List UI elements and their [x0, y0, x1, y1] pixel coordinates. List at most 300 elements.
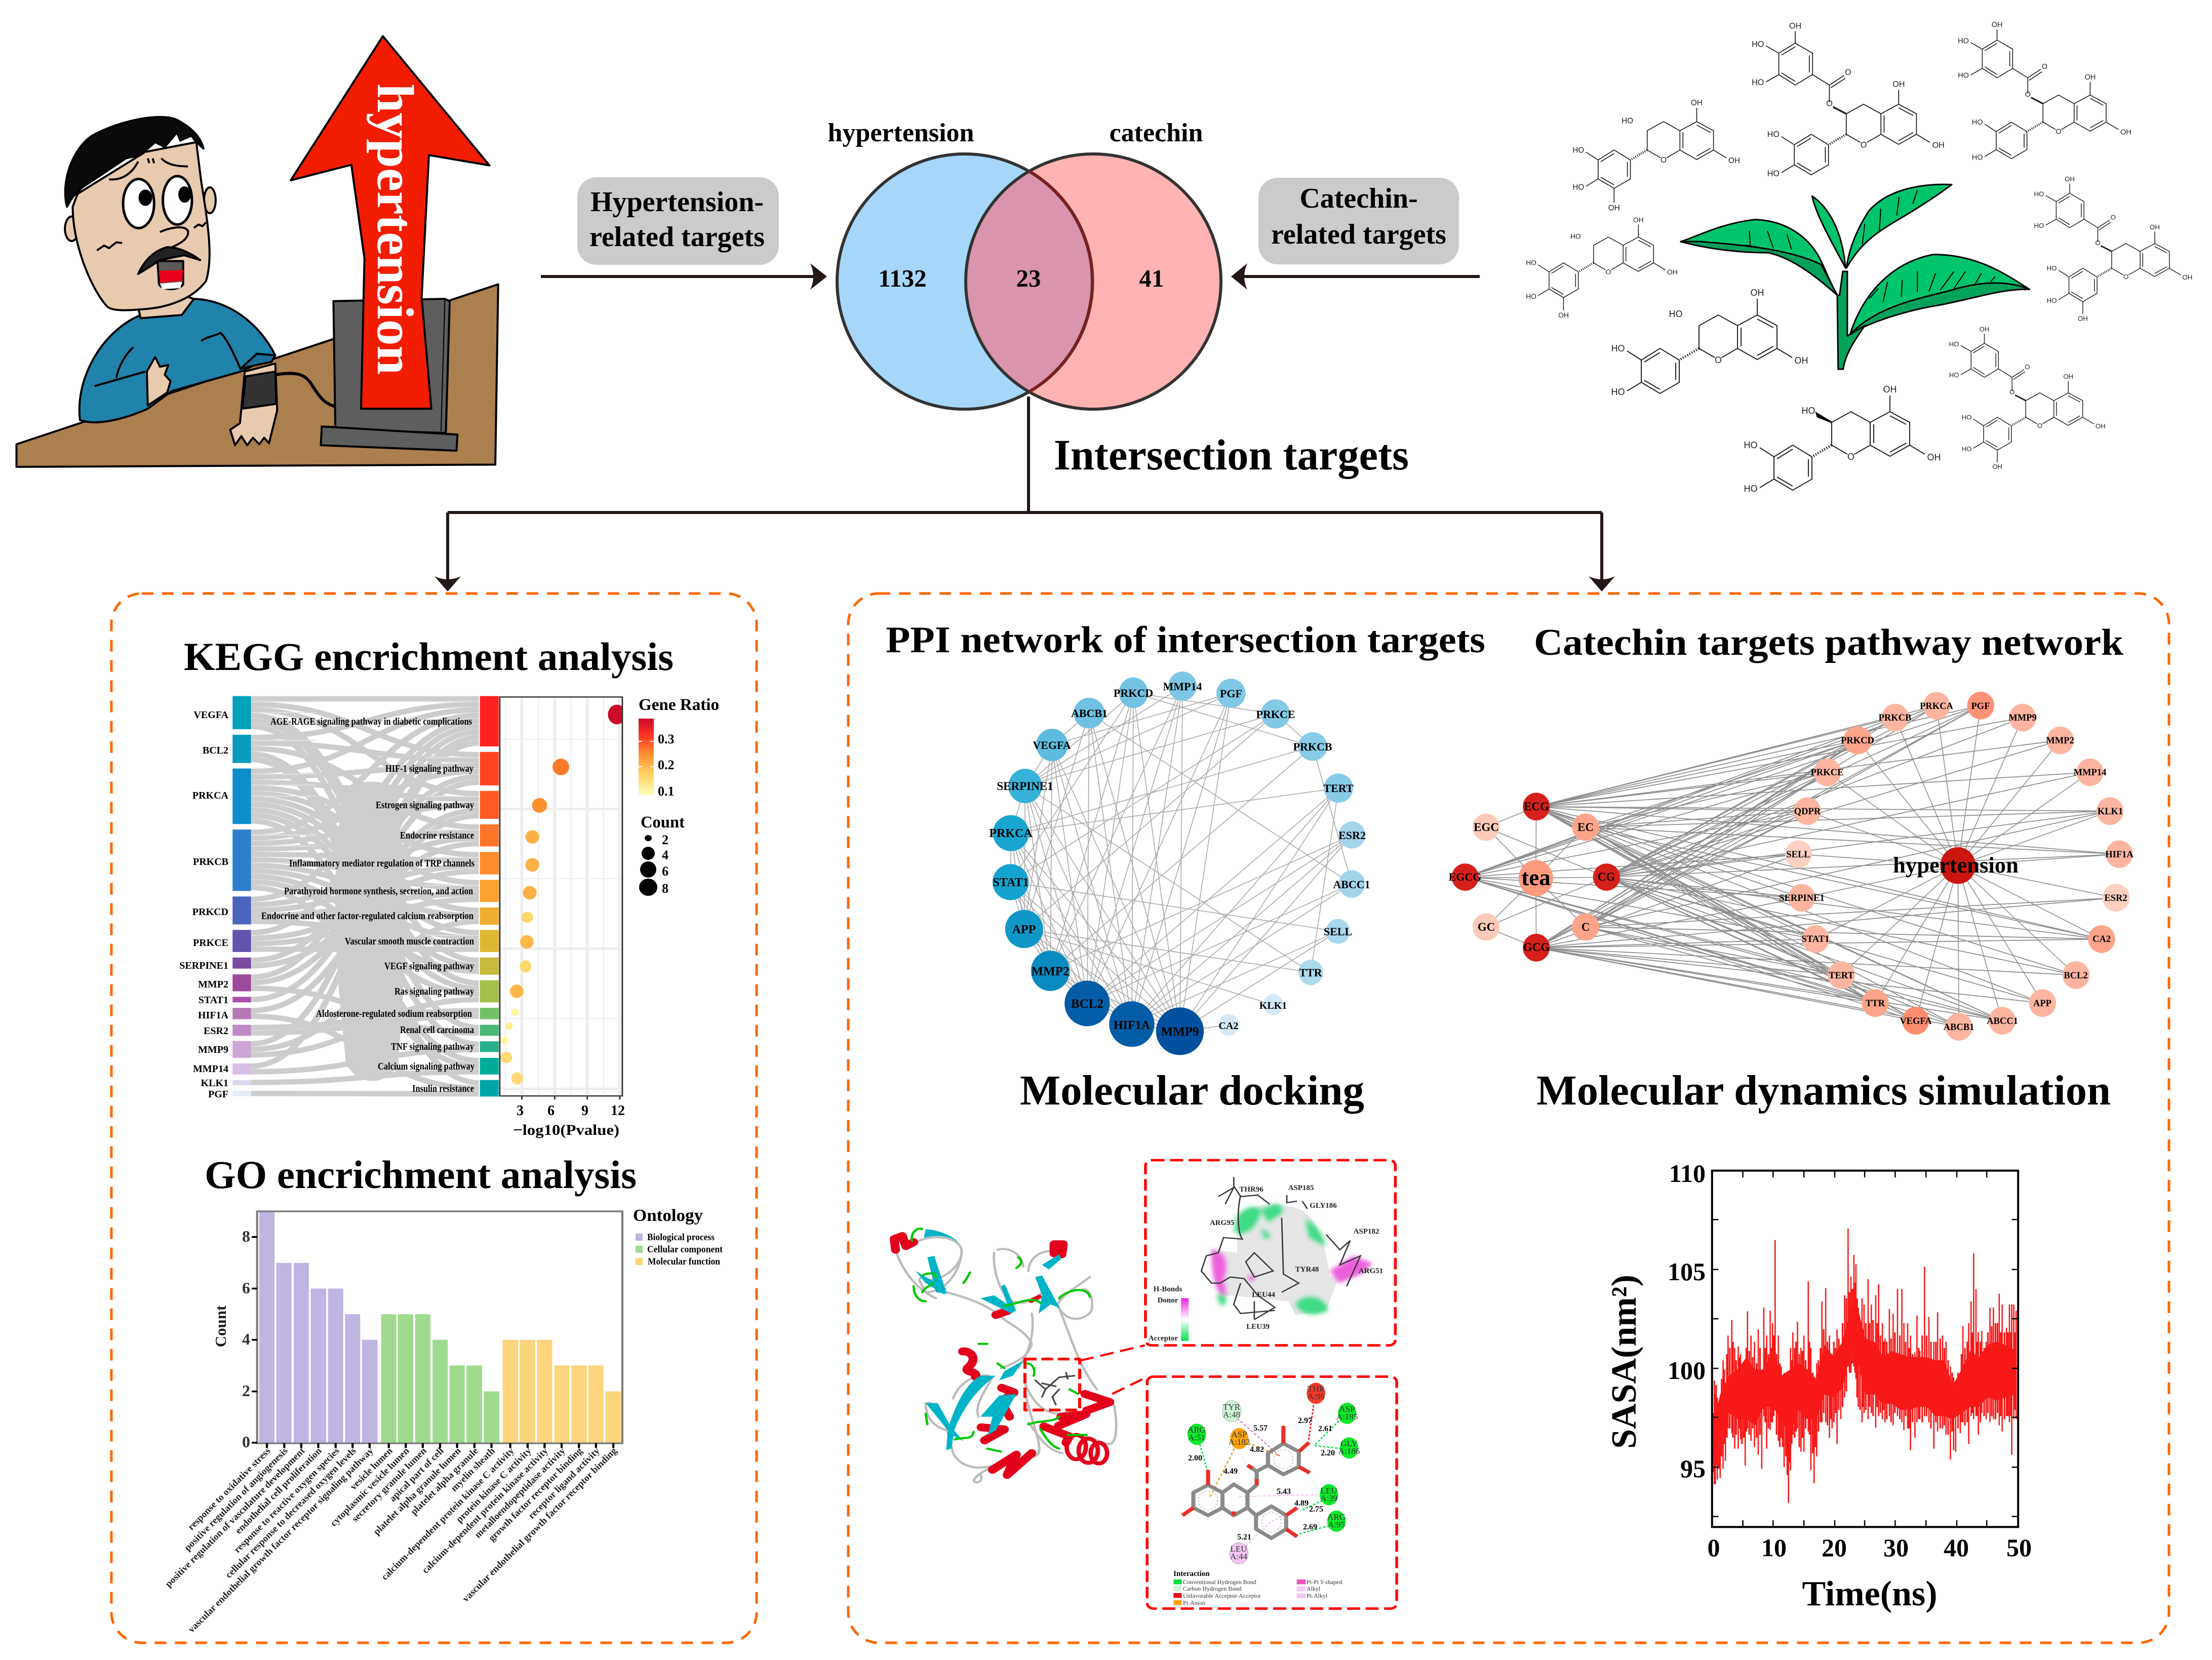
- dot plot x axis labels: [517, 1103, 625, 1119]
- x axis category labels: receptor ligand activity: [526, 1445, 602, 1521]
- pathway network labels: PGF: [1971, 701, 1990, 712]
- legend: count: 8: [662, 881, 668, 896]
- pathway network labels: MMP14: [2074, 768, 2106, 778]
- pathway network labels: ECG: [1524, 800, 1549, 813]
- interaction residue labels: [1188, 1384, 1360, 1561]
- y axis labels: 2: [242, 1381, 250, 1400]
- interaction residue labels: ASP: [1231, 1430, 1247, 1439]
- gene labels: ESR2: [204, 1025, 228, 1037]
- venn count: intersection: 23: [1016, 264, 1041, 292]
- structure: epigallocatechin upper left: OH: [1608, 204, 1620, 212]
- pathway network labels: MMP2: [2046, 736, 2074, 746]
- PPI node labels: BCL2: [1071, 997, 1103, 1011]
- interaction distances: 2.97: [1298, 1416, 1312, 1425]
- y axis labels: 4: [242, 1330, 250, 1348]
- surface residue labels: ASP185: [1288, 1184, 1314, 1192]
- interaction distances: 4.49: [1223, 1467, 1238, 1476]
- structure: catechin bottom: OH: [1927, 452, 1941, 462]
- pathway labels: Ras signaling pathway: [394, 986, 474, 997]
- icon: tea leaves: [1681, 184, 2030, 369]
- structure: gallocatechin gallate lower right: OH: [2063, 373, 2073, 380]
- structure: gallocatechin gallate lower right: O: [2009, 388, 2014, 396]
- SASA y axis labels: 95: [1680, 1454, 1706, 1483]
- surface residue labels: LEU44: [1252, 1291, 1275, 1299]
- PPI node labels: PRKCD: [1114, 687, 1153, 699]
- chart: SASA time series: [1605, 1159, 2032, 1613]
- structure: epicatechin gallate top right: HO: [1972, 154, 1983, 162]
- pathway network labels: PRKCB: [1879, 713, 1911, 723]
- panel: network docking and dynamics: [848, 594, 2169, 1643]
- x axis category labels: platelet alpha granule: [409, 1445, 481, 1517]
- pathway labels: VEGF signaling pathway: [384, 961, 474, 972]
- gene labels: BCL2: [203, 745, 228, 756]
- structure: epicatechin left: HO: [1611, 387, 1625, 397]
- pathway network labels: STAT1: [1802, 934, 1829, 944]
- x axis category labels: platelet alpha granule lumen: [371, 1445, 463, 1537]
- PPI node labels: STAT1: [993, 876, 1029, 889]
- interaction legend: Pi-Pi T-shaped: [1307, 1578, 1342, 1586]
- arrow: hypertension targets to venn: [541, 263, 827, 290]
- structure: catechin bottom: O: [1847, 452, 1854, 462]
- structure: epicatechin gallate top right: O: [2042, 63, 2047, 71]
- structure: gallocatechin gallate lower right: OH: [1992, 463, 2002, 470]
- x axis category labels: vascular endothelial growth factor receptor signaling pathway: [186, 1445, 376, 1635]
- pathway network labels: EGC: [1474, 821, 1499, 834]
- pathway network labels: CG: [1598, 871, 1615, 883]
- arrow: catechin targets to venn: [1231, 263, 1480, 290]
- PPI node labels: TTR: [1299, 966, 1323, 979]
- interaction residue labels: A:95: [1328, 1520, 1345, 1529]
- structure: catechin bottom: OH: [1883, 384, 1897, 394]
- x axis category labels: positive regulation of vasculature development: [163, 1445, 307, 1590]
- PPI node labels: APP: [1012, 923, 1036, 936]
- venn circle: catechin: [966, 154, 1221, 409]
- legend: gene ratio: 0.1: [658, 784, 675, 799]
- interaction residue labels: A:51: [1188, 1433, 1205, 1442]
- x axis category labels: apical part of cell: [387, 1446, 446, 1504]
- PPI node labels: SERPINE1: [997, 780, 1053, 793]
- structure: epicatechin left: OH: [1750, 288, 1764, 298]
- x axis category labels: myelin sheath: [449, 1445, 497, 1494]
- PPI node labels: [989, 680, 1370, 1039]
- x axis category labels: response to reactive oxygen species: [232, 1446, 342, 1555]
- structure: catechin gallate top: OH: [1932, 141, 1945, 150]
- label box: catechin-related targets: [1258, 178, 1459, 264]
- PPI node labels: KLK1: [1259, 1000, 1287, 1011]
- legend: count: 2: [662, 833, 668, 847]
- chart: PPI network: [989, 671, 1370, 1055]
- legend: ontology: [633, 1206, 723, 1267]
- legend: gene ratio: Gene Ratio: [639, 696, 719, 714]
- chart: GO bar chart: [163, 1206, 723, 1635]
- venn diagram: [828, 118, 1221, 409]
- PPI node labels: ABCC1: [1333, 878, 1370, 891]
- label box: hypertension-related targets: Hypertension-: [590, 186, 764, 218]
- interaction distances: 5.43: [1277, 1487, 1291, 1496]
- heading: molecular docking: Molecular docking: [1020, 1067, 1364, 1114]
- venn set label: catechin: catechin: [1110, 118, 1203, 147]
- SASA x axis labels: 50: [2006, 1533, 2032, 1562]
- label box: hypertension-related targets: [577, 177, 779, 265]
- structure: catechin bottom: [1744, 384, 1941, 494]
- legend: ontology: Cellular component: [647, 1244, 723, 1255]
- panel: 2D interaction diagram: [1147, 1376, 1397, 1608]
- structure: epigallocatechin upper left: HO: [1572, 183, 1584, 191]
- structure: catechin gallate top: HO: [1752, 78, 1764, 87]
- PPI node labels: CA2: [1219, 1020, 1238, 1032]
- dot plot x axis labels: 6: [547, 1103, 555, 1119]
- man figure: [65, 117, 277, 445]
- gene labels: VEGFA: [193, 709, 229, 721]
- heading: PPI network: PPI network of intersection targets: [886, 619, 1485, 661]
- structure: catechin gallate top: HO: [1752, 39, 1764, 49]
- structure: catechin bottom: HO: [1744, 440, 1757, 450]
- pathway network labels: MMP9: [2008, 713, 2037, 723]
- interaction residue labels: TYR: [1223, 1402, 1241, 1412]
- structure: epigallocatechin gallate right: OH: [2078, 314, 2088, 322]
- SASA trace: [1712, 1229, 2017, 1503]
- dot plot x axis labels: 9: [581, 1103, 588, 1119]
- surface residue labels: Acceptor: [1149, 1334, 1178, 1342]
- structure: epigallocatechin upper left: OH: [1728, 156, 1740, 165]
- interaction distances: 2.20: [1321, 1449, 1335, 1457]
- catechin structures and tea plant: [1526, 21, 2192, 494]
- PPI node labels: VEGFA: [1033, 739, 1071, 752]
- structure: epigallocatechin gallate right: OH: [2182, 273, 2192, 281]
- pathway network labels: hypertension: [1893, 852, 2019, 878]
- legend: ontology: Molecular function: [648, 1256, 720, 1267]
- SASA x axis labels: 40: [1944, 1533, 1969, 1562]
- x axis category labels: vesicle lumen: [348, 1445, 395, 1492]
- interaction residue labels: LEU: [1230, 1544, 1247, 1554]
- x axis category labels: secretory granule lumen: [350, 1445, 429, 1524]
- interaction legend: Interaction: [1173, 1570, 1210, 1578]
- legend: gene ratio: [639, 696, 719, 799]
- PPI node labels: HIF1A: [1114, 1019, 1151, 1032]
- structure: epigallocatechin gallate right: HO: [2046, 297, 2057, 304]
- y axis labels: [242, 1227, 250, 1451]
- structure: epicatechin left: OH: [1795, 355, 1808, 366]
- structure: gallocatechin gallate lower right: [1949, 326, 2106, 470]
- interaction legend: Unfavorable Acceptor-Acceptor: [1183, 1592, 1261, 1599]
- pathway network labels: KLK1: [2098, 807, 2123, 817]
- pathway network labels: EGCG: [1449, 871, 1481, 883]
- structure: epicatechin gallate top right: OH: [2120, 128, 2131, 136]
- legend: gene ratio: 0.2: [658, 758, 675, 772]
- surface residue labels: ARG51: [1359, 1267, 1383, 1275]
- SASA x axis labels: 10: [1761, 1533, 1787, 1562]
- connector: intersection to analysis panels: [434, 397, 1615, 591]
- structure: catechin gallate top: [1752, 21, 1945, 178]
- pathway labels: Endocrine resistance: [400, 830, 474, 841]
- PPI node labels: PRKCE: [1256, 708, 1295, 721]
- gene labels: PRKCE: [193, 937, 228, 948]
- interaction residue labels: GLY: [1340, 1439, 1358, 1448]
- PPI node labels: TERT: [1323, 782, 1354, 795]
- illustration: man with hypertension: [17, 36, 498, 467]
- structure: epigallocatechin gallate right: OH: [2150, 223, 2160, 231]
- interaction distances: 4.89: [1294, 1499, 1309, 1508]
- pathway network labels: tea: [1521, 865, 1551, 890]
- interaction distances: 2.69: [1303, 1523, 1317, 1531]
- interaction residue labels: A:182: [1229, 1437, 1250, 1447]
- structure: gallocatechin gallate lower right: HO: [1962, 445, 1971, 453]
- pathway blocks: [480, 696, 499, 1096]
- structure: epigallocatechin gallate right: [2034, 175, 2192, 322]
- selection box on protein: [1025, 1359, 1080, 1410]
- structure: epigallocatechin gallate right: OH: [2065, 175, 2075, 183]
- structure: gallocatechin gallate lower right: O: [2025, 363, 2030, 371]
- panel: surface binding pocket: [1146, 1160, 1395, 1346]
- structure: epicatechin gallate top right: O: [2025, 91, 2031, 99]
- interaction residue labels: A:44: [1230, 1552, 1248, 1561]
- pathway network labels: EC: [1577, 821, 1594, 834]
- interaction distances: [1188, 1416, 1335, 1542]
- pathway network labels: TTR: [1866, 999, 1885, 1009]
- surface residue labels: [1149, 1184, 1383, 1342]
- structure: epigallocatechin upper left: HO: [1622, 117, 1633, 126]
- pathway network labels: PRKCD: [1841, 736, 1874, 746]
- zoom connector lines: [1080, 1346, 1147, 1394]
- heading: intersection targets: Intersection targets: [1054, 430, 1409, 479]
- SASA x axis labels: 30: [1883, 1533, 1909, 1562]
- rising arrow: [291, 36, 490, 409]
- structure: gallocatechin gallate lower right: HO: [1962, 413, 1971, 421]
- interaction legend: Pi-Anion: [1183, 1599, 1205, 1606]
- PPI node labels: MMP9: [1161, 1025, 1199, 1039]
- x axis category labels: calcium-dependent protein kinase C activity: [379, 1445, 517, 1583]
- gene labels: SERPINE1: [179, 960, 228, 971]
- pathway labels: Parathyroid hormone synthesis, secretion, and action: [284, 886, 473, 897]
- interaction legend: Carbon Hydrogen Bond: [1183, 1585, 1241, 1592]
- PPI node labels: MMP14: [1163, 680, 1202, 693]
- structure: epicatechin gallate top right: HO: [1972, 118, 1983, 127]
- interaction legend: [1173, 1570, 1342, 1606]
- pathway network nodes: [1452, 692, 2132, 1041]
- structure: epicatechin gallate top right: HO: [1958, 37, 1969, 46]
- legend: gene ratio: 0.3: [658, 732, 675, 746]
- structure: gallocatechin far left: O: [1606, 267, 1611, 275]
- legend: count: 6: [662, 864, 668, 879]
- structure: epigallocatechin upper left: [1572, 99, 1740, 212]
- gene labels: PRKCB: [193, 856, 228, 867]
- panel: enrichment analyses: [111, 594, 757, 1643]
- PPI node labels: SELL: [1324, 925, 1352, 938]
- surface residue labels: LEU39: [1246, 1323, 1270, 1331]
- interaction residue labels: A:39: [1320, 1493, 1337, 1503]
- structure: epicatechin gallate top right: OH: [1992, 21, 2002, 29]
- interaction residue labels: ARG: [1327, 1512, 1346, 1522]
- structure: gallocatechin gallate lower right: OH: [2096, 422, 2106, 430]
- x axis category labels: metalloendopeptidase activity: [472, 1445, 568, 1540]
- pathway labels: HIF-1 signaling pathway: [385, 763, 473, 774]
- pathway network labels: GCG: [1523, 941, 1550, 954]
- pathway network labels: [1449, 701, 2134, 1033]
- gene labels: MMP14: [193, 1063, 228, 1075]
- structure: gallocatechin gallate lower right: HO: [1949, 340, 1959, 348]
- pathway network labels: CA2: [2092, 934, 2111, 944]
- pathway labels: Vascular smooth muscle contraction: [345, 936, 474, 947]
- PPI node labels: MMP2: [1032, 965, 1069, 978]
- PPI nodes: [993, 671, 1365, 1055]
- interaction residue labels: ARG: [1188, 1425, 1206, 1435]
- structure: epigallocatechin upper left: OH: [1691, 99, 1703, 107]
- pathway network edges: [1465, 705, 2119, 1027]
- pathway network labels: ABCB1: [1944, 1022, 1974, 1033]
- structure: gallocatechin far left: OH: [1667, 268, 1678, 276]
- legend: count: Count: [641, 813, 685, 832]
- figure: molecular docking: [894, 1160, 1397, 1608]
- PPI edges: [1011, 686, 1352, 1031]
- pathway network labels: HIF1A: [2105, 850, 2134, 860]
- pathway labels: TNF signaling pathway: [391, 1041, 474, 1052]
- structure: catechin gallate top: O: [1861, 140, 1867, 149]
- surface residue labels: TYR48: [1295, 1266, 1319, 1274]
- structure: catechin gallate top: HO: [1767, 130, 1780, 139]
- gene labels: PGF: [208, 1089, 228, 1100]
- x axis category labels: protein kinase C activity: [454, 1445, 534, 1525]
- structure: gallocatechin far left: OH: [1633, 216, 1644, 224]
- interaction residue labels: THR: [1308, 1384, 1325, 1394]
- y axis labels: 6: [242, 1279, 250, 1297]
- interaction distances: 2.61: [1318, 1425, 1332, 1433]
- gene labels: MMP2: [198, 979, 228, 990]
- pathway network labels: SERPINE1: [1779, 893, 1825, 903]
- structure: epicatechin gallate top right: O: [2056, 128, 2062, 136]
- structure: catechin gallate top: HO: [1767, 169, 1780, 178]
- x axis category labels: endothelial cell proliferation: [233, 1445, 324, 1536]
- structure: catechin gallate top: OH: [1892, 80, 1905, 89]
- gene labels: STAT1: [199, 995, 228, 1006]
- pathway labels: Calcium signaling pathway: [378, 1061, 475, 1072]
- structure: gallocatechin far left: [1526, 216, 1678, 319]
- legend: ontology: Ontology: [633, 1206, 703, 1225]
- x axis category labels: vascular endothelial growth factor receptor binding: [460, 1445, 619, 1604]
- x axis category labels: positive regulation of angiogenesis: [182, 1446, 290, 1553]
- pathway labels: Renal cell carcinoma: [400, 1024, 474, 1036]
- SASA x axis title: Time(ns): [1802, 1574, 1938, 1613]
- x axis category labels: calcium-dependent protein kinase activity: [420, 1445, 550, 1576]
- structure: catechin gallate top: OH: [1789, 21, 1801, 30]
- gene labels: KLK1: [201, 1078, 228, 1089]
- structure: epigallocatechin gallate right: HO: [2034, 222, 2044, 229]
- pathway network labels: ABCC1: [1987, 1016, 2018, 1026]
- dot plot x axis labels: 3: [517, 1103, 524, 1119]
- structure: epigallocatechin gallate right: HO: [2034, 190, 2044, 198]
- SASA y axis title: SASA(nm²): [1605, 1275, 1644, 1449]
- venn overlap: [965, 171, 1093, 392]
- pathway labels: Insulin resistance: [412, 1083, 474, 1094]
- SASA y axis labels: 100: [1668, 1356, 1706, 1385]
- gene labels: [179, 709, 229, 1100]
- pathway labels: Estrogen signaling pathway: [376, 800, 474, 811]
- PPI node labels: PRKCA: [989, 827, 1033, 840]
- SASA y axis labels: 110: [1669, 1159, 1706, 1188]
- surface residue labels: GLY186: [1310, 1202, 1337, 1210]
- x axis category labels: cellular response to decreased oxygen levels: [223, 1446, 359, 1580]
- y axis title: Count: [212, 1305, 229, 1347]
- interaction residue labels: A:48: [1223, 1410, 1240, 1419]
- structure: gallocatechin far left: HO: [1526, 292, 1536, 300]
- interaction legend: Pi-Alkyl: [1307, 1592, 1328, 1599]
- legend: ontology: Biological process: [647, 1232, 715, 1243]
- pathway network labels: TERT: [1829, 971, 1854, 981]
- interaction residue labels: A:186: [1338, 1446, 1360, 1456]
- gene labels: PRKCD: [192, 906, 228, 918]
- heading: KEGG enrichment: KEGG encrichment analysis: [184, 635, 674, 679]
- protein ribbon structure: [894, 1229, 1147, 1482]
- structure: gallocatechin far left: HO: [1526, 259, 1536, 267]
- desk: [17, 284, 498, 467]
- interaction distances: 5.57: [1253, 1424, 1268, 1433]
- structure: gallocatechin far left: HO: [1570, 232, 1581, 240]
- legend: count: [639, 813, 685, 896]
- structure: catechin gallate top: O: [1826, 99, 1833, 108]
- surface residue labels: ARG95: [1210, 1219, 1234, 1227]
- pathway labels: AGE-RAGE signaling pathway in diabetic complications: [270, 716, 472, 727]
- pathway network labels: PRKCA: [1920, 701, 1954, 712]
- surface residue labels: ASP182: [1354, 1228, 1379, 1236]
- gene blocks: [232, 696, 251, 1096]
- y axis labels: 0: [242, 1433, 250, 1451]
- x axis category labels: response to oxidative stress: [186, 1446, 273, 1532]
- pathway network labels: BCL2: [2064, 971, 2088, 981]
- label box: catechin-related targets: Catechin-: [1299, 183, 1418, 214]
- interaction distances: 5.21: [1237, 1533, 1251, 1542]
- venn set label: hypertension: hypertension: [828, 118, 974, 147]
- dot plot x axis labels: 12: [611, 1103, 625, 1119]
- PPI node labels: PRKCB: [1293, 740, 1332, 753]
- PPI node labels: ABCB1: [1071, 707, 1108, 720]
- SASA x axis labels: 0: [1708, 1533, 1720, 1562]
- heading: molecular dynamics: Molecular dynamics simulation: [1536, 1067, 2111, 1114]
- pathway labels: Endocrine and other factor-regulated calcium reabsorption: [261, 911, 473, 922]
- SASA axes: [1712, 1171, 2018, 1527]
- pathway labels: Aldosterone-regulated sodium reabsorption: [316, 1008, 472, 1019]
- structure: epicatechin gallate top right: [1958, 21, 2131, 162]
- structure: catechin gallate top: O: [1845, 68, 1851, 77]
- gene labels: HIF1A: [198, 1010, 229, 1021]
- interaction residue labels: LEU: [1320, 1486, 1337, 1495]
- interaction distances: 2.00: [1188, 1454, 1202, 1463]
- structure: epicatechin left: HO: [1669, 309, 1682, 319]
- interaction legend: Conventional Hydrogen Bond: [1183, 1578, 1256, 1586]
- legend: count: 4: [662, 848, 668, 862]
- structure: epigallocatechin gallate right: O: [2123, 273, 2128, 281]
- gene labels: PRKCA: [192, 790, 229, 801]
- interaction residue labels: A:185: [1336, 1412, 1358, 1421]
- structure: gallocatechin gallate lower right: OH: [1980, 326, 1989, 333]
- SASA y axis labels: 105: [1668, 1257, 1706, 1286]
- interaction distances: 4.82: [1250, 1445, 1264, 1454]
- y axis labels: 8: [242, 1227, 250, 1245]
- sankey flows: [251, 699, 479, 1094]
- SASA x axis labels: [1708, 1533, 2032, 1562]
- structure: epigallocatechin gallate right: O: [2095, 239, 2101, 247]
- heading: pathway network: Catechin targets pathway network: [1534, 622, 2124, 663]
- venn count: catechin only: 41: [1139, 264, 1164, 292]
- pathway network labels: SELL: [1786, 850, 1810, 860]
- pathway labels: [261, 716, 475, 1094]
- structure: epigallocatechin gallate right: O: [2111, 214, 2116, 221]
- SASA x axis labels: 20: [1822, 1533, 1847, 1562]
- PPI node labels: PGF: [1220, 687, 1242, 700]
- pathway network labels: C: [1582, 921, 1590, 933]
- x axis category labels: cytoplasmic vesicle lumen: [328, 1445, 412, 1529]
- chart: catechin pathway network: [1449, 692, 2134, 1041]
- structure: catechin bottom: HO: [1744, 484, 1757, 494]
- venn circle: hypertension: [837, 154, 1092, 409]
